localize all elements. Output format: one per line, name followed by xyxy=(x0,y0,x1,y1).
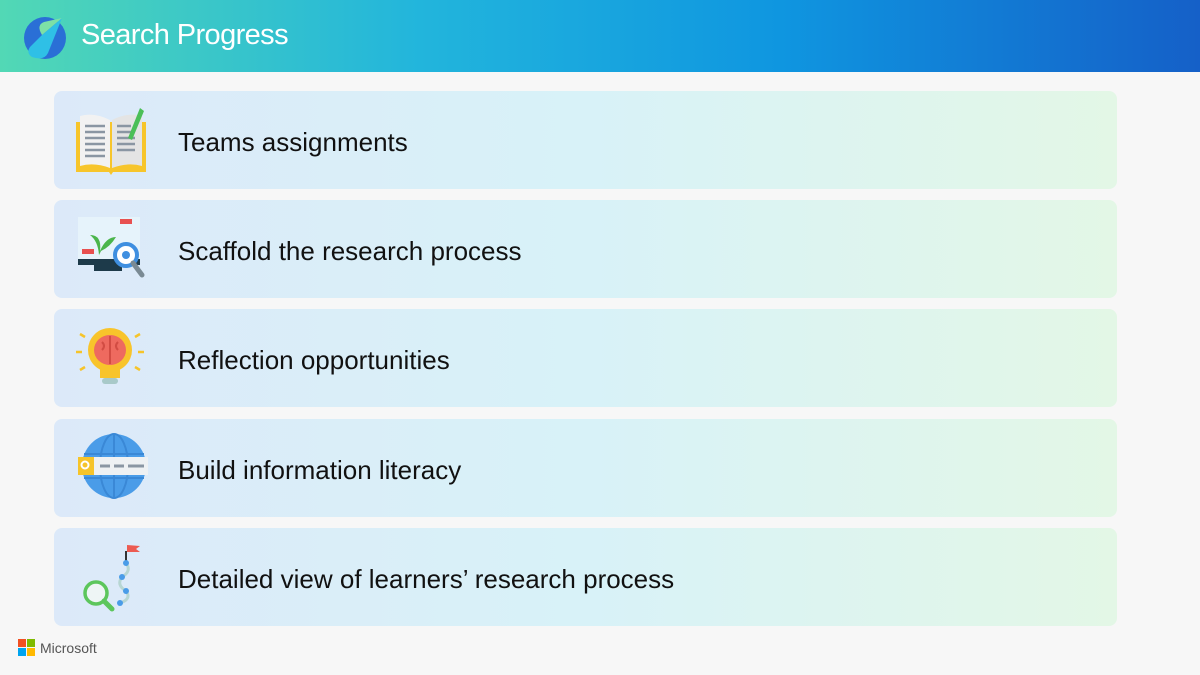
row 5: Detailed view xyxy=(54,528,1117,626)
Microsoft logo: Microsoft xyxy=(40,640,97,656)
icon: path with magnifier and flag xyxy=(83,545,140,612)
icon: lightbulb brain xyxy=(76,328,144,384)
icon: open book xyxy=(76,108,146,175)
icon: globe with search bar xyxy=(78,433,148,499)
label: Scaffold the research process xyxy=(178,236,521,266)
row 4: information literacy xyxy=(54,419,1117,517)
label: Detailed view of learners’ research process xyxy=(178,564,674,594)
label: Teams assignments xyxy=(178,127,408,157)
row 3: Reflection xyxy=(54,309,1117,407)
header bar xyxy=(0,0,1200,72)
label: Build information literacy xyxy=(178,455,461,485)
Microsoft logo xyxy=(18,639,97,656)
row 1: Teams assignments xyxy=(54,91,1117,189)
icon: monitor with plant and magnifier xyxy=(78,217,144,278)
label: Reflection opportunities xyxy=(178,345,450,375)
title: Search Progress xyxy=(81,19,288,51)
logo icon xyxy=(24,17,66,59)
row 2: Scaffold xyxy=(54,200,1117,298)
